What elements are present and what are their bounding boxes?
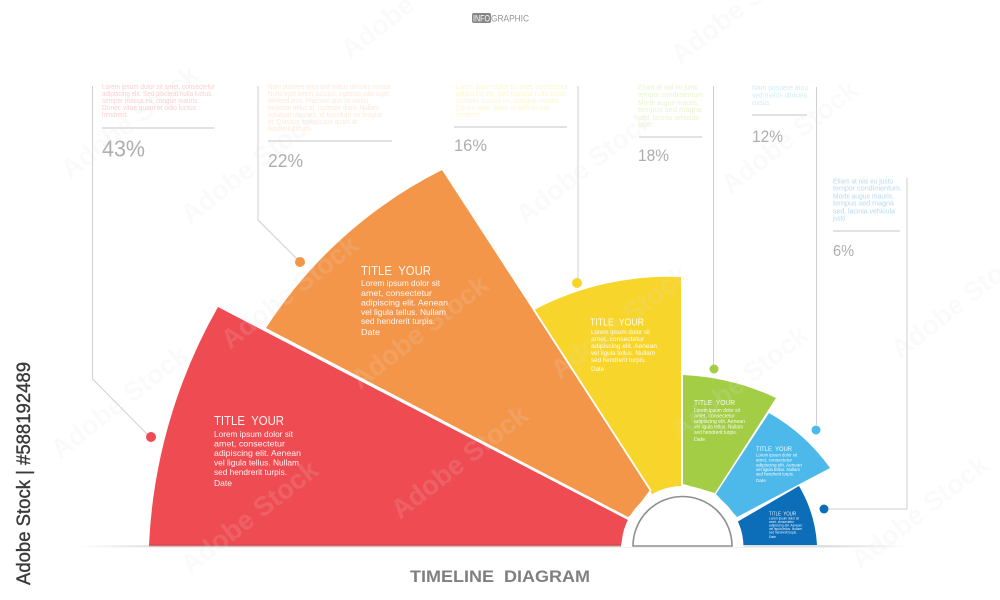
wedge text: yellow: Lorem ipsum dolor sit [591,329,650,336]
wedge: green [683,375,776,493]
wedge text: dark blue: Date [769,535,776,539]
dot: red [146,432,156,442]
callout: red 43%: semper massa eu, congue mauris. [102,96,199,105]
wedge text: red: TITLE YOUR [214,413,284,428]
wedge text: yellow: amet, consectetur [591,336,645,343]
callout: dark blue 6%: 6% [833,243,854,260]
wedge text: green: adipiscing elit. Aenean [694,419,745,425]
callout: red 43%: adipiscing elit. Sed placerat nulla luctus, [102,89,213,98]
callout: orange 22%: Nam posuere arcu sed metus ultricies cursus. [268,82,392,91]
wedge: yellow [534,277,681,495]
wedge text: green: vel ligula tellus. Nullam [694,424,743,430]
callout: green 18% [637,82,705,165]
callout: green 18%: sed, lacinia vehicula [638,113,700,122]
wedge text: yellow: Date [591,366,604,373]
watermarks: Adobe Stock [665,319,815,445]
sector: green 18% [683,364,776,493]
wedge text: green [694,398,745,443]
wedge text: orange: amet, consectetur [361,288,432,298]
wedge text: red [214,413,301,488]
wedge text: dark blue: sed hendrerit turpis. [769,530,797,534]
dot: light blue [812,426,820,434]
watermarks: Adobe Stock [175,104,325,230]
callout: green 18%: 18% [638,146,669,165]
header: infographic tag: GRAPHIC [491,14,529,24]
callout: light blue 12%: sed metus ultricies [752,90,807,100]
callout: dark blue 6%: justo. [832,214,847,222]
callout: dark blue 6%: Morbi augue mauris, [833,192,894,200]
wedge: orange [266,170,650,517]
callout: yellow 16%: Donec vitae quam et odio luctus [456,103,549,112]
sector: orange 22% [266,170,650,517]
watermarks: Adobe Stock [55,59,205,185]
callout: red 43%: hendrerit. [102,110,128,119]
wedge text: red: vel ligula tellus. Nullam [214,458,299,468]
callout: orange 22%: eleifend eros. Praesent quis mi varius, [268,96,370,105]
callout: dark blue 6% [832,176,902,260]
wedge text: light blue: sed hendrerit turpis. [756,472,794,476]
callout: red 43%: 43% [102,136,145,162]
dot: green [710,364,718,374]
callout: yellow 16%: semper massa eu, congue mauris. [456,96,561,105]
callout: red 43%: Donec vitae quam et odio luctus [102,103,196,112]
sector: light blue 12% [716,413,830,517]
wedge text: dark blue: vel ligula tellus. Nullam [769,527,802,531]
wedge text: green: amet, consectetur [694,414,735,420]
callout: dark blue 6%: Etiam at nisi eu justo [833,176,893,186]
baseline shadow [80,545,910,548]
wedge text: green: Lorem ipsum dolor sit [694,408,741,414]
callout: yellow 16%: Lorem ipsum dolor sit amet, consectetur [456,82,568,91]
wedge text: orange: adipiscing elit. Aenean [361,298,448,308]
callout: green 18%: tempor condimentum. [638,90,705,99]
wedge text: yellow [590,318,657,373]
callout: green 18%: justo. [637,120,652,129]
side credit: stock id: Adobe Stock | #588192489 [14,362,35,585]
watermarks: Adobe Stock [215,229,365,355]
wedge text: orange: Date [361,327,380,337]
wedge text: orange: sed hendrerit turpis. [361,316,435,326]
callout: orange 22%: et. Quisque scelerisque quam at [268,117,358,126]
wedge text: green: Date [694,437,705,443]
callout: light blue 12% [752,83,808,146]
sector: red 43% [146,307,628,545]
watermarks: Adobe Stock [345,269,495,395]
wedge text: orange [361,263,448,337]
wedge text: yellow: TITLE YOUR [590,318,644,328]
callout: green 18%: Morbi augue mauris, [638,98,699,107]
callout: dark blue 6%: tempor condimentum. [833,184,902,192]
wedge text: light blue: Date [756,478,767,483]
wedge separator: orange and yellow [534,310,651,491]
dot: orange [295,257,305,267]
callout: dark blue 6%: sed, lacinia vehicula [833,206,896,216]
leader lines [92,86,907,509]
wedge text: light blue [756,446,802,483]
wedge text: dark blue: Lorem ipsum dolor sit [769,516,799,520]
callout: orange 22% [268,82,392,171]
center hub semicircle [622,486,744,547]
header: infographic tag: INFO [473,14,490,24]
callout: orange 22%: volutpat ultricies, id tincidunt mi feugiat [268,110,383,119]
callout: red 43%: Lorem ipsum dolor sit amet, consectetur [102,82,215,91]
callout: yellow 16% [454,82,568,155]
callout: orange 22%: molestie tellus at, molestie diam. Nullam [268,103,379,112]
watermarks: Adobe Stock [510,104,660,230]
callout: green 18%: tempus sed magna [638,105,703,114]
watermarks: Adobe Stock [45,339,195,465]
callout: orange 22%: Nulla eget lorem suscipit, egestas odio eget, [268,89,390,98]
callout: light blue 12%: 12% [752,127,783,146]
sector: yellow 16% [534,277,681,495]
wedge text: green: TITLE YOUR [694,398,736,407]
callout: orange 22%: 22% [268,150,303,171]
wedge text: red: Date [214,478,232,488]
wedge text: dark blue: amet, consectetur [769,520,795,524]
callout: yellow 16%: 16% [454,136,487,155]
sector: dark blue 6% [737,486,828,545]
watermarks: Adobe Stock [385,399,535,525]
wedge text: light blue: amet, consectetur [756,458,792,462]
callout: dark blue 6%: tempus sed magna [833,198,895,208]
wedge text: red: Lorem ipsum dolor sit [214,429,294,439]
dot: dark blue [820,504,828,514]
red sector bottom shade [149,544,621,546]
callout: yellow 16%: adipiscing elit. Sed placerat nulla luctus, [456,89,568,98]
wedge text: dark blue: adipiscing elit. Aenean [769,524,802,528]
wedge text: dark blue [769,512,802,539]
footer title: TIMELINE DIAGRAM [410,567,590,586]
wedge text: orange: Lorem ipsum dolor sit [361,278,441,288]
wedge text: light blue: TITLE YOUR [756,446,792,453]
header: infographic tag [472,13,529,24]
callout: green 18%: Etiam at nisl eu justo [638,82,698,92]
wedge text: orange: vel ligula tellus. Nullam [361,307,446,317]
callout: red 43% [102,82,215,162]
watermarks: Adobe Stock [845,449,995,575]
watermarks: Adobe Stock [175,454,325,580]
wedge text: green: sed hendrerit turpis. [694,430,737,436]
wedge: light blue [716,413,830,517]
wedge text: light blue: Lorem ipsum dolor sit [756,452,798,458]
wedge text: red: sed hendrerit turpis. [214,467,287,477]
callout: light blue 12%: Nam posuere arcu [752,83,808,92]
wedge text: light blue: adipiscing elit. Aenean [756,462,802,468]
dot: yellow [572,278,582,288]
callout: orange 22%: hendrerit rutrum. [268,124,310,133]
callout: yellow 16%: hendrerit. [456,110,481,119]
wedge text: orange: TITLE YOUR [361,263,431,278]
watermarks: Adobe Stock [715,74,865,200]
wedge text: light blue: vel ligula tellus. Nullam [756,467,800,472]
wedge: dark blue [737,486,817,545]
wedge text: yellow: sed hendrerit turpis. [591,357,646,364]
wedge: red [149,307,628,545]
watermarks: Adobe Stock [545,259,695,385]
wedge text: yellow: vel ligula tellus. Nullam [591,350,655,357]
wedge text: red: adipiscing elit. Aenean [214,448,301,458]
wedge text: yellow: adipiscing elit. Aenean [591,343,657,350]
wedge text: dark blue: TITLE YOUR [769,512,796,518]
callout: light blue 12%: cursus. [752,98,771,107]
wedge text: red: amet, consectetur [214,438,285,448]
